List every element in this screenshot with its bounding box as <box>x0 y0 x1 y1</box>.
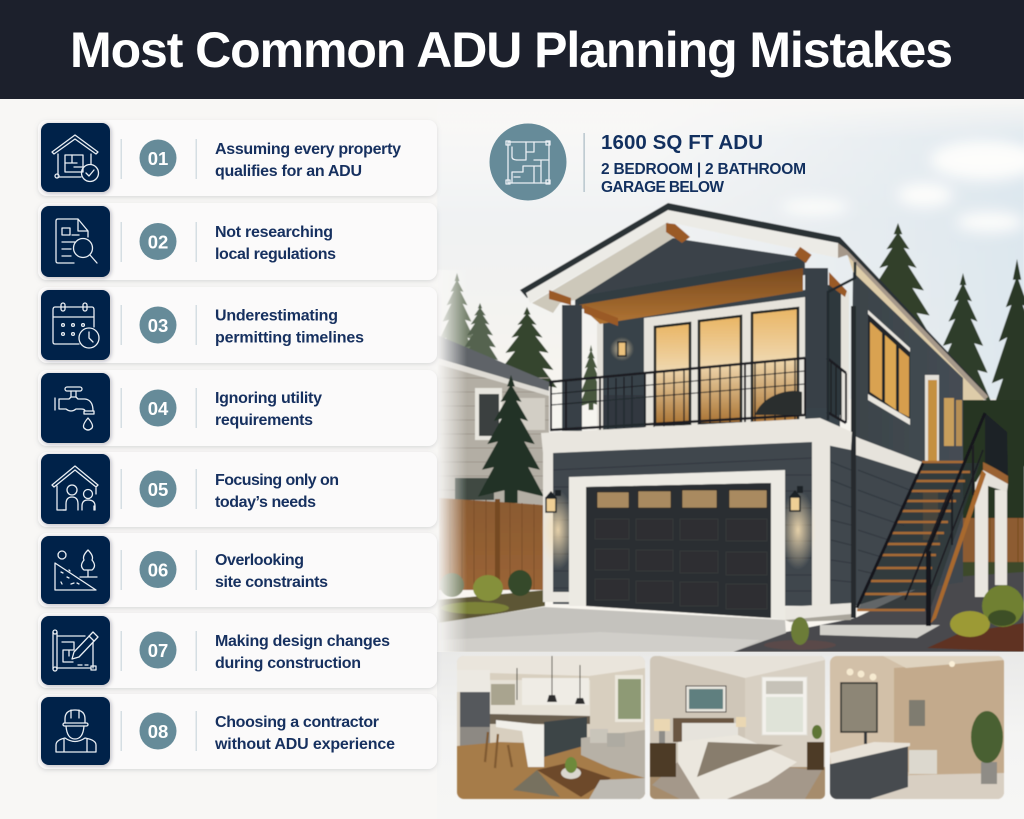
stair support posts <box>975 482 988 597</box>
card 07 <box>38 613 437 688</box>
right tree mass and fence <box>963 518 1024 582</box>
wall lamp upper <box>610 337 634 361</box>
card 02: Not researching <box>215 224 333 241</box>
hero fades <box>437 99 1024 660</box>
callout details <box>601 161 806 196</box>
garage side wall <box>830 445 963 606</box>
card 05: 05 <box>148 479 168 500</box>
card 04: 04 <box>148 398 169 419</box>
lit door glimpse <box>923 490 938 540</box>
card 03: 03 <box>148 315 168 336</box>
lamp glow <box>541 490 816 570</box>
garage wall lamps <box>545 486 803 512</box>
icon: sloped site with tree <box>55 550 97 590</box>
roof <box>520 203 988 400</box>
icon: construction worker <box>56 710 96 752</box>
card 03: Underestimating <box>215 308 338 324</box>
title bar <box>0 0 1024 99</box>
landscaping plants <box>440 570 1024 645</box>
card 04 <box>38 370 437 446</box>
photo: kitchen and living room <box>457 656 645 799</box>
icon: dripping faucet <box>55 387 94 430</box>
hero photo: ADU house with garage <box>437 99 1024 660</box>
card 01: qualifies for an ADU <box>215 163 362 180</box>
title: Most Common ADU Planning Mistakes <box>70 22 953 78</box>
card 06: Overlooking <box>215 552 304 569</box>
card 03: permitting timelines <box>215 330 364 346</box>
card 03 <box>38 287 437 363</box>
wood brackets <box>549 223 847 326</box>
icon: document with magnifier <box>56 219 97 263</box>
icon: calendar with clock <box>53 303 99 348</box>
card 08: 08 <box>148 721 168 742</box>
card 06: site constraints <box>215 574 328 591</box>
icon: floor plan <box>490 124 566 200</box>
card 05 <box>38 452 437 527</box>
background fir trees <box>437 223 1024 525</box>
porch posts <box>562 268 856 618</box>
room photos <box>457 656 1004 799</box>
gable wall <box>575 238 805 310</box>
callout heading: 1600 SQ FT ADU <box>601 131 763 154</box>
exterior stairs <box>857 413 1008 626</box>
card 05: Focusing only on <box>215 472 339 489</box>
icon: house with family <box>52 466 98 510</box>
siding lines <box>553 458 920 591</box>
garage door trim <box>569 470 785 620</box>
sliding door glass <box>655 308 798 425</box>
card 08: Choosing a contractor <box>215 714 379 731</box>
spec callout: 1600 sq ft ADU <box>490 124 806 200</box>
card 08: without ADU experience <box>214 736 395 753</box>
sliding door frame <box>644 297 805 428</box>
balcony railing <box>549 358 846 431</box>
wooden fence left <box>439 498 544 590</box>
white slab below balcony <box>541 418 852 453</box>
card 02 <box>38 203 437 280</box>
card 01 <box>38 120 437 196</box>
downspout <box>828 262 855 420</box>
wood soffit <box>578 268 803 324</box>
side windows <box>868 310 962 463</box>
neighbouring house <box>437 335 549 505</box>
small tree between post and wall <box>579 345 603 410</box>
upper balcony wall <box>603 285 840 432</box>
porch beam <box>575 258 803 305</box>
card 07: Making design changes <box>215 633 390 650</box>
card 04: Ignoring utility <box>215 390 322 407</box>
callout divider <box>584 133 585 192</box>
card 05: today’s needs <box>215 494 316 511</box>
sky <box>437 99 1024 654</box>
card 07: 07 <box>148 640 168 661</box>
ground: gravel, mulch and driveway <box>437 572 1024 652</box>
upper storey side wall <box>851 270 963 470</box>
landing <box>983 462 1008 484</box>
lower strip behind room photos <box>437 652 1024 819</box>
callout details: 2 BEDROOM | 2 BATHROOM <box>601 161 806 178</box>
garage wall <box>553 442 812 606</box>
card 06: 06 <box>148 560 168 580</box>
icon: blueprint and pencil <box>53 630 98 671</box>
white corner trims <box>543 441 851 622</box>
photo: bathroom <box>830 656 1004 799</box>
card 07: during construction <box>215 655 361 672</box>
card 02: local regulations <box>215 246 336 263</box>
card 02: 02 <box>148 232 168 252</box>
photo: bedroom <box>650 656 825 799</box>
white band on side wall <box>856 437 922 475</box>
soffit along right eave <box>847 253 988 400</box>
garage door <box>586 483 771 618</box>
card 01: Assuming every property <box>215 141 401 158</box>
card 06 <box>38 533 437 607</box>
card 08 <box>38 694 437 769</box>
card 01: 01 <box>148 148 168 169</box>
treads <box>857 462 970 610</box>
mistakes list <box>38 120 437 769</box>
callout details: GARAGE BELOW <box>601 179 724 196</box>
icon: house with plan and check <box>52 135 98 182</box>
card 04: requirements <box>215 412 313 429</box>
